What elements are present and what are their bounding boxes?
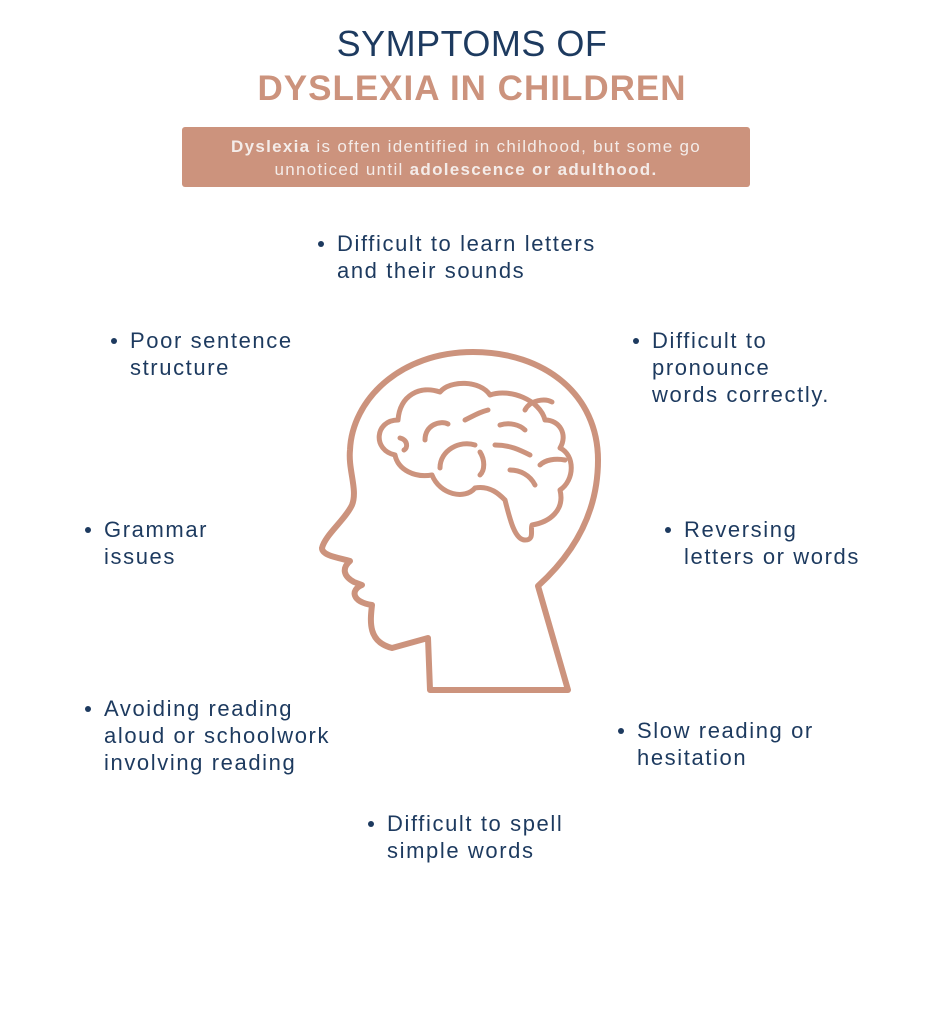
symptom: slow reading: Slow reading or xyxy=(637,718,814,743)
symptom: sentence structure: structure xyxy=(130,355,230,380)
symptom: avoiding reading: aloud or schoolwork xyxy=(104,723,330,748)
symptom: slow reading xyxy=(637,717,814,771)
symptom: avoiding reading: involving reading xyxy=(104,750,296,775)
symptom: pronounce xyxy=(652,327,830,408)
symptom: pronounce: words correctly. xyxy=(652,382,830,407)
symptom: sentence structure xyxy=(130,327,293,381)
symptom: letters and sounds: and their sounds xyxy=(337,258,525,283)
banner: Dyslexia is often identified in childhood, but some go xyxy=(231,137,701,156)
symptom: spelling xyxy=(387,810,563,864)
symptom: reversing xyxy=(684,516,860,570)
symptom: letters and sounds: Difficult to learn letters xyxy=(337,231,596,256)
symptom: letters and sounds xyxy=(337,230,596,284)
title: SYMPTOMS OF xyxy=(337,23,607,64)
symptom: grammar xyxy=(104,516,208,570)
symptom: sentence structure: Poor sentence xyxy=(130,328,293,353)
symptom: slow reading: hesitation xyxy=(637,745,747,770)
symptom: grammar: Grammar xyxy=(104,517,208,542)
banner: unnoticed until adolescence or adulthood. xyxy=(274,160,658,179)
symptom: pronounce: Difficult to xyxy=(652,328,767,353)
symptom: spelling: simple words xyxy=(387,838,535,863)
symptom: grammar: issues xyxy=(104,544,176,569)
symptom: avoiding reading xyxy=(104,695,330,776)
symptom: reversing: Reversing xyxy=(684,517,797,542)
symptom: avoiding reading: Avoiding reading xyxy=(104,696,293,721)
symptom: spelling: Difficult to spell xyxy=(387,811,563,836)
title xyxy=(257,23,686,108)
title: DYSLEXIA IN CHILDREN xyxy=(257,69,686,108)
symptom: reversing: letters or words xyxy=(684,544,860,569)
banner xyxy=(182,127,750,187)
symptom: pronounce: pronounce xyxy=(652,355,770,380)
